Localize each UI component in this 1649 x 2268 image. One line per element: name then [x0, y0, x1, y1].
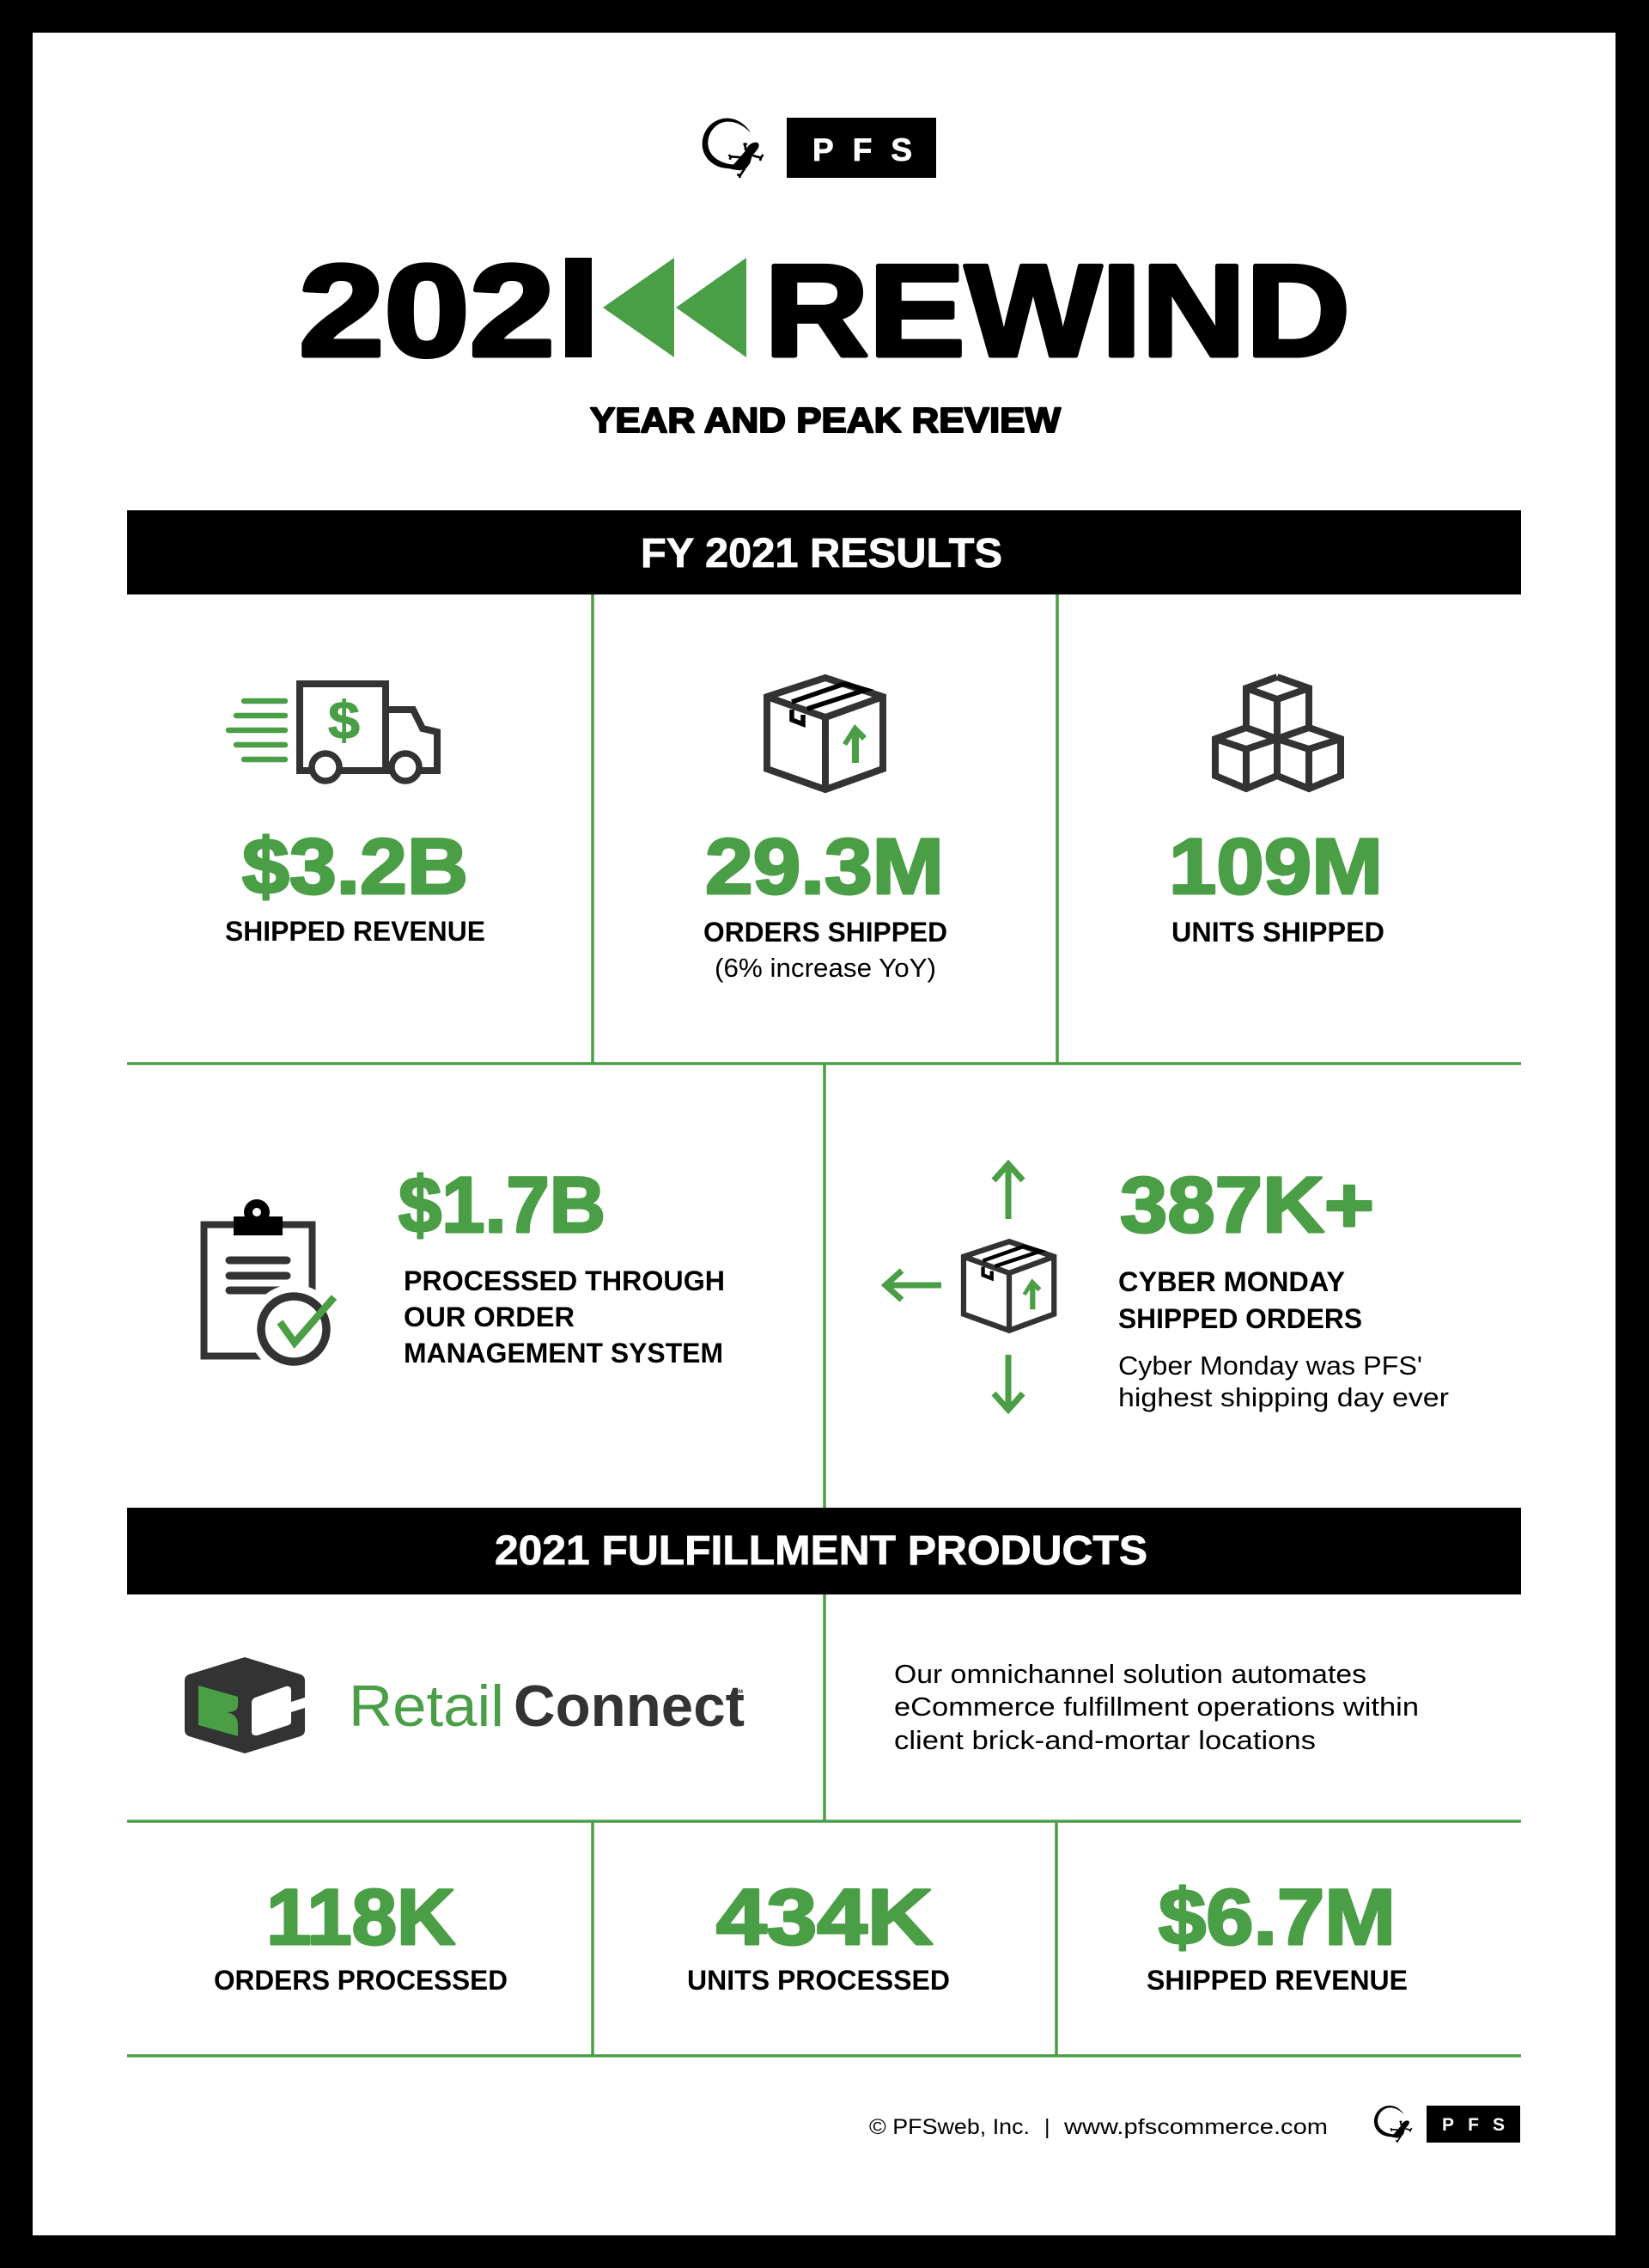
- title: 1: [537, 238, 610, 384]
- stat description: [404, 1265, 725, 1369]
- stat: units processed: 434K: [716, 1874, 933, 1961]
- icon: clipboard with check: [204, 1199, 338, 1374]
- title: REWIND: [764, 238, 1350, 384]
- footer text: www.pfscommerce.com: [1063, 2115, 1328, 2139]
- stat: orders processed: 118K: [266, 1874, 455, 1961]
- stat description: PROCESSED THROUGH: [404, 1265, 725, 1296]
- stat label: SHIPPED REVENUE: [225, 916, 485, 947]
- stat value: $1.7B: [399, 1161, 605, 1249]
- subtitle: YEAR AND PEAK REVIEW: [590, 400, 1061, 440]
- stat value: 387K+: [1120, 1161, 1374, 1249]
- stat: units processed: UNITS PROCESSED: [687, 1965, 950, 1996]
- section heading: FY 2021 results: FY 2021 RESULTS: [641, 531, 1002, 576]
- icon: footer lizard: [1374, 2106, 1412, 2143]
- icon: parcel box: [767, 678, 883, 790]
- stat description: highest shipping day ever: [1118, 1382, 1449, 1412]
- stat: orders processed: ORDERS PROCESSED: [214, 1965, 508, 1996]
- stat label: UNITS SHIPPED: [1171, 917, 1384, 948]
- stat note: (6% increase YoY): [715, 953, 936, 983]
- stat description: OUR ORDER: [404, 1302, 575, 1332]
- RetailConnect description: eCommerce fulfillment operations within: [894, 1692, 1419, 1722]
- stat description: CYBER MONDAY: [1118, 1266, 1345, 1297]
- stat: product shipped revenue: [1147, 1874, 1408, 1996]
- section heading: fulfillment products: [127, 1508, 1521, 1594]
- icon: delivery truck: [228, 684, 437, 781]
- panel: shipped revenue: [225, 684, 485, 947]
- stat description: [1118, 1266, 1449, 1412]
- stat: units processed: [687, 1874, 950, 1996]
- panel: order management system: [204, 1161, 725, 1374]
- section heading: FY 2021 results: [127, 510, 1521, 594]
- header logo: [703, 118, 936, 178]
- stat value: 29.3M: [705, 823, 944, 911]
- title: 202: [299, 238, 555, 384]
- icon: PFS lizard: [703, 119, 763, 178]
- footer: [869, 2106, 1520, 2143]
- icon: delivery truck: $: [328, 692, 360, 751]
- RetailConnect logo: Retail: [349, 1674, 504, 1739]
- PFS wordmark: [787, 118, 936, 178]
- RetailConnect description: Our omnichannel solution automates: [894, 1659, 1366, 1689]
- footer PFS wordmark: [1427, 2106, 1520, 2143]
- stat description: MANAGEMENT SYSTEM: [404, 1338, 723, 1369]
- icon: parcel with direction arrows: [885, 1164, 1054, 1410]
- RetailConnect logo: Connect: [514, 1674, 745, 1739]
- footer text: [869, 2115, 1328, 2139]
- stat value: 109M: [1169, 823, 1383, 911]
- RetailConnect description: client brick-and-mortar locations: [894, 1725, 1316, 1755]
- panel: units shipped: [1169, 677, 1384, 948]
- stat description: SHIPPED ORDERS: [1118, 1303, 1362, 1334]
- stat: product shipped revenue: SHIPPED REVENUE: [1147, 1965, 1408, 1996]
- stat: product shipped revenue: $6.7M: [1159, 1874, 1396, 1961]
- section heading: fulfillment products: 2021 FULFILLMENT PRODUCTS: [495, 1528, 1147, 1574]
- RetailConnect description: [894, 1659, 1419, 1755]
- footer PFS wordmark: PFS: [1442, 2115, 1505, 2135]
- icon: stacked cubes: [1215, 677, 1341, 789]
- RetailConnect logo: SM: [735, 1690, 743, 1695]
- RetailConnect logo: [185, 1657, 745, 1753]
- PFS wordmark: PFS: [812, 132, 912, 168]
- stat value: $3.2B: [242, 823, 468, 911]
- icon: RC cube: [185, 1657, 305, 1753]
- footer text: |: [1044, 2115, 1050, 2139]
- stat label: ORDERS SHIPPED: [703, 917, 947, 948]
- stat: orders processed: [214, 1874, 508, 1996]
- icon: rewind arrows: [603, 258, 746, 357]
- footer text: © PFSweb, Inc.: [869, 2115, 1030, 2139]
- panel: cyber monday: [885, 1161, 1449, 1412]
- panel: orders shipped: [703, 678, 947, 983]
- title: [301, 258, 1347, 359]
- stat description: Cyber Monday was PFS': [1118, 1350, 1422, 1381]
